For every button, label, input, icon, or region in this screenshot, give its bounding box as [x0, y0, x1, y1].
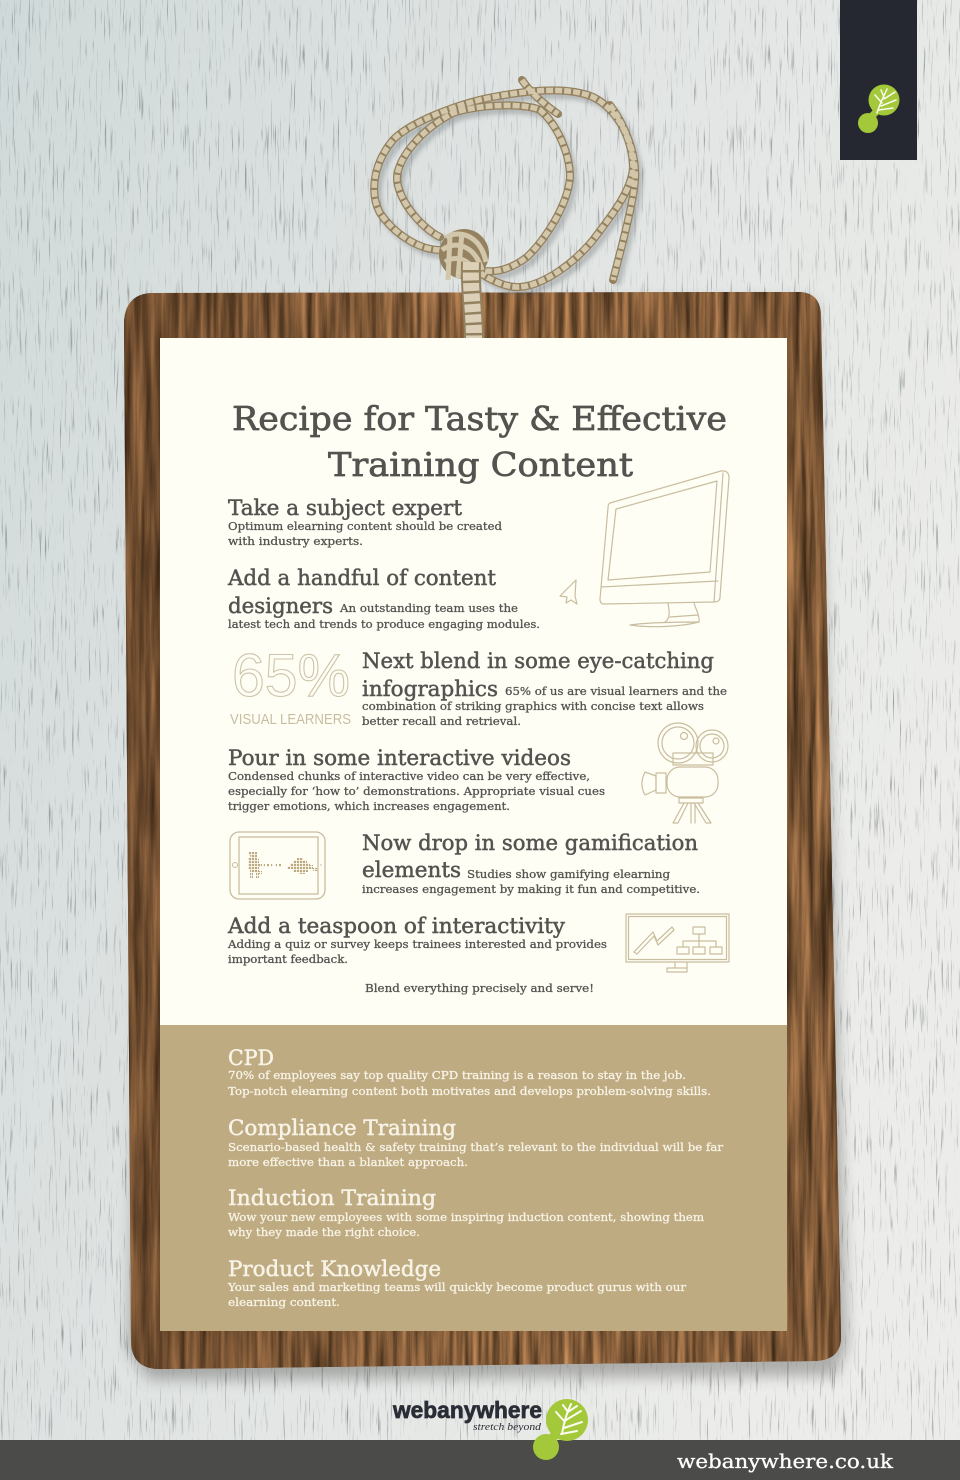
step: subject expert — [228, 496, 503, 548]
step: gamification: Studies show gamifying elearning — [467, 867, 671, 881]
step: interactivity: Add a teaspoon of interactivity — [227, 914, 565, 938]
step: content designers — [227, 566, 540, 631]
step: content designers: An outstanding team uses the — [339, 601, 518, 615]
step: gamification: increases engagement by making it fun and competitive. — [362, 882, 700, 896]
webanywhere logo: stretch beyond — [473, 1421, 542, 1433]
section: product knowledge: Your sales and marketing teams will quickly become product gurus with our — [227, 1280, 687, 1294]
section: product knowledge: Product Knowledge — [228, 1257, 441, 1281]
step: infographics: Next blend in some eye-catching — [362, 649, 714, 673]
step: infographics: better recall and retrieval. — [362, 714, 521, 728]
footer url: webanywhere.co.uk — [677, 1449, 894, 1473]
section: induction training: Wow your new employees with some inspiring induction content, showing them — [228, 1210, 704, 1224]
section: compliance training: Scenario-based health & safety training that’s relevant to the individual will be far — [228, 1140, 724, 1154]
section: CPD: 70% of employees say top quality CPD training is a reason to stay in the job. — [228, 1068, 686, 1082]
step: content designers: latest tech and trends to produce engaging modules. — [228, 617, 540, 631]
title: Recipe for Tasty & Effective — [232, 399, 727, 438]
board drop shadow — [128, 300, 848, 1380]
step: subject expert: Optimum elearning content should be created — [228, 519, 503, 533]
stat: 65% visual learners: VISUAL LEARNERS — [230, 711, 351, 728]
step: infographics: infographics — [362, 677, 498, 701]
stat: 65% visual learners: 65% — [232, 642, 350, 709]
step: gamification — [362, 831, 700, 896]
webanywhere logo: webanywhere — [392, 1397, 542, 1423]
section: product knowledge — [227, 1257, 687, 1309]
step: subject expert: with industry experts. — [228, 534, 363, 548]
icon: computer monitor and cursor — [560, 471, 729, 627]
tan lower panel — [160, 1025, 787, 1331]
step: infographics: combination of striking graphics with concise text allows — [362, 699, 704, 713]
section: compliance training — [228, 1116, 724, 1169]
footer bar — [0, 1440, 960, 1480]
step: gamification: Now drop in some gamification — [362, 831, 698, 855]
step: interactivity: important feedback. — [228, 952, 348, 966]
step: gamification: elements — [362, 858, 461, 882]
icon: tablet with pixel game — [230, 832, 325, 899]
section: compliance training: more effective than a blanket approach. — [228, 1155, 468, 1169]
step: interactive videos: especially for ‘how to’ demonstrations. Appropriate visual cues — [228, 784, 605, 798]
paper recipe card — [160, 338, 787, 1026]
section: induction training: Induction Training — [228, 1186, 436, 1210]
step: interactive videos — [228, 746, 605, 813]
step: interactive videos: trigger emotions, which increases engagement. — [228, 799, 510, 813]
section: product knowledge: elearning content. — [228, 1295, 340, 1309]
title: Training Content — [328, 445, 633, 484]
step: subject expert: Take a subject expert — [228, 496, 463, 520]
section: induction training — [228, 1186, 704, 1239]
step: interactive videos: Pour in some interactive videos — [228, 746, 571, 770]
step: content designers: Add a handful of content — [227, 566, 497, 590]
step: infographics — [362, 649, 727, 728]
step: interactivity: Adding a quiz or survey keeps trainees interested and provides — [227, 937, 607, 951]
step: interactive videos: Condensed chunks of interactive video can be very effective, — [228, 769, 590, 783]
section: CPD — [228, 1046, 711, 1098]
step: infographics: 65% of us are visual learners and the — [505, 684, 727, 698]
closing line: Blend everything precisely and serve! — [365, 981, 594, 995]
section: induction training: why they made the right choice. — [228, 1225, 420, 1239]
icon: presentation board with charts — [626, 914, 729, 972]
title — [232, 399, 727, 484]
wooden chopping board — [124, 292, 841, 1369]
twine rope loop and knot — [374, 80, 639, 338]
section: compliance training: Compliance Training — [228, 1116, 456, 1140]
section: CPD: Top-notch elearning content both motivates and develops problem-solving skills. — [228, 1084, 711, 1098]
step: content designers: designers — [228, 594, 333, 618]
step: interactivity — [227, 914, 607, 966]
icon: film camera — [642, 723, 728, 823]
dark corner tag with leaf logo — [840, 0, 917, 160]
webanywhere logo — [392, 1397, 588, 1460]
section: CPD: CPD — [228, 1046, 274, 1070]
